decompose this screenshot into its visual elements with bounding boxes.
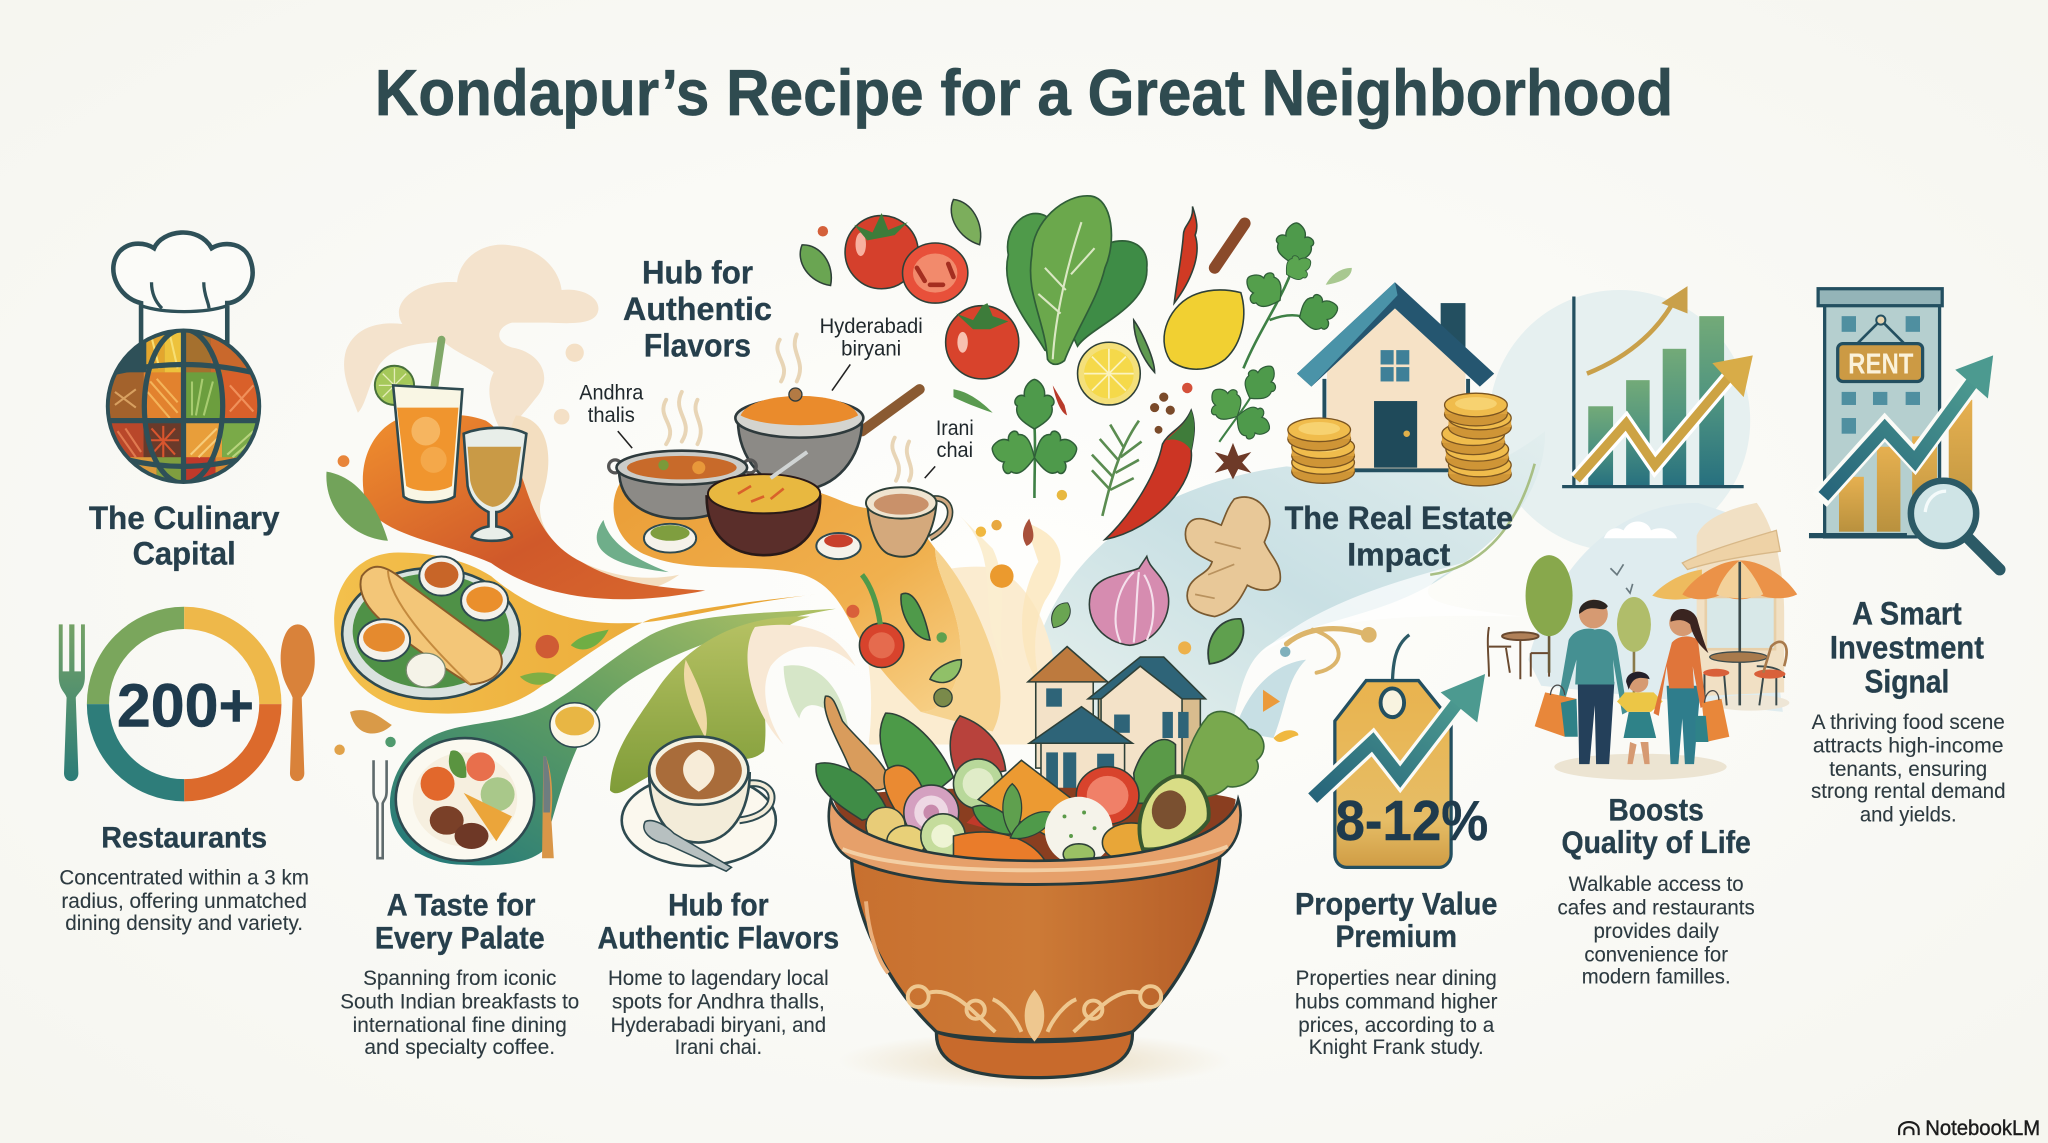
ground shadow	[839, 1032, 1230, 1089]
swoosh: drinks orange	[363, 414, 705, 599]
heading: the real estate impact	[1285, 499, 1513, 573]
lemon slice	[1078, 342, 1140, 405]
text: boosts quality of life: modern familles.	[1582, 964, 1731, 989]
heading: top hub for authentic flavors: Authentic	[623, 290, 772, 327]
text: property value premium	[1295, 886, 1497, 1059]
callout: Hyderabadi biryani: biryani	[841, 337, 901, 360]
callout: Hyderabadi biryani	[820, 315, 923, 391]
text: hub for authentic flavors	[598, 888, 839, 1059]
icon: fine dining plate	[334, 703, 600, 861]
woman	[1654, 609, 1708, 764]
swoosh: central hub orange	[614, 476, 1061, 745]
ground shadow	[1554, 754, 1727, 780]
text: a smart investment signal: Investment	[1830, 628, 1984, 665]
bowl interior	[833, 788, 1236, 865]
text: a smart investment signal: A Smart	[1852, 594, 1962, 631]
text: restaurants: Concentrated within a 3 km	[59, 864, 309, 889]
text: boosts quality of life: cafes and restaurants	[1558, 894, 1755, 919]
awning and umbrella	[1652, 570, 1702, 600]
food	[816, 696, 1264, 865]
text: restaurants: Restaurants	[101, 822, 267, 855]
text: a taste for every palate: and specialty coffee.	[364, 1034, 555, 1059]
cloud and birds	[1604, 522, 1677, 538]
swoosh: pale blue real estate stream	[1028, 290, 1783, 738]
spice globe	[104, 327, 261, 486]
text: property value premium: hubs command higher	[1295, 988, 1497, 1013]
heading: The Culinary Capital	[89, 499, 280, 571]
text: boosts quality of life: convenience for	[1584, 941, 1728, 966]
logo: NotebookLM: NotebookLM	[1925, 1117, 2040, 1140]
text: a smart investment signal: Signal	[1864, 662, 1949, 699]
icon: drinks	[326, 340, 526, 541]
callout: Irani chai: Irani	[936, 417, 974, 440]
callout: Irani chai	[925, 417, 974, 478]
text: a taste for every palate: A Taste for	[387, 888, 536, 923]
text: boosts quality of life: Quality of Life	[1561, 825, 1751, 860]
stat: 200+ restaurants plate: 200+	[117, 671, 254, 740]
parsley mid	[988, 379, 1081, 498]
parsley small right	[1189, 346, 1302, 463]
icon: price tag with arrow: 8-12%	[1336, 789, 1488, 852]
icon: chef hat and spice globe	[104, 233, 261, 486]
tomatoes	[818, 213, 1019, 379]
magnifier	[1911, 481, 2000, 570]
fork	[59, 624, 85, 781]
cafe building	[1697, 503, 1784, 696]
text: a smart investment signal: and yields.	[1860, 802, 1957, 827]
bowl foot	[936, 1032, 1132, 1078]
text: property value premium: Properties near dining	[1296, 965, 1497, 990]
icon: cooking pots	[609, 388, 920, 559]
text: hub for authentic flavors: Home to lagendary local	[608, 965, 829, 990]
icon: rent building with arrow and magnifier: RENT	[1848, 349, 1914, 381]
onion	[1089, 556, 1169, 645]
text: property value premium: Property Value	[1295, 886, 1497, 921]
rosemary	[1092, 421, 1142, 516]
man	[1558, 600, 1627, 764]
text: a taste for every palate: international fine dining	[353, 1012, 567, 1037]
biryani bowl	[707, 452, 820, 555]
thali pot	[609, 451, 756, 519]
small leaves	[792, 238, 840, 292]
callout: Hyderabadi biryani: Hyderabadi	[820, 315, 923, 338]
ring	[98, 618, 270, 790]
heading: the real estate impact: Impact	[1347, 536, 1451, 573]
stat: 200+ restaurants plate	[59, 618, 315, 790]
text: hub for authentic flavors: Hyderabadi biryani, and	[611, 1012, 826, 1037]
icon: rent building with arrow and magnifier	[1809, 289, 2000, 570]
text: restaurants	[59, 822, 309, 935]
heading: top hub for authentic flavors: Flavors	[644, 327, 751, 364]
chart: rising bars with arrows	[1562, 286, 1753, 487]
chef hat	[113, 233, 253, 342]
ornament	[908, 986, 1161, 1038]
spinach	[1007, 196, 1147, 364]
swoosh: green fine dining	[390, 609, 836, 865]
callout: Irani chai: chai	[936, 439, 973, 462]
text: restaurants: dining density and variety.	[65, 910, 303, 935]
big pot with handle	[735, 388, 920, 490]
callout: Andhra thalis: thalis	[588, 404, 635, 427]
left table	[1488, 627, 1549, 679]
text: restaurants: radius, offering unmatched	[61, 888, 307, 913]
spoon	[281, 624, 315, 781]
text: a smart investment signal	[1811, 594, 2006, 827]
icon: chai cup	[866, 487, 950, 557]
text: a taste for every palate: Spanning from iconic	[363, 965, 557, 990]
swoosh: breakfast yellow	[334, 553, 816, 714]
icon: bowl of ingredients and houses	[816, 647, 1298, 1089]
text: property value premium: Knight Frank study.	[1309, 1034, 1484, 1059]
heading: top hub for authentic flavors	[623, 253, 772, 364]
heading: The Culinary Capital: The Culinary	[89, 499, 280, 536]
text: a smart investment signal: attracts high-income	[1813, 732, 2004, 757]
text: boosts quality of life	[1558, 792, 1755, 989]
text: property value premium: Premium	[1336, 919, 1457, 954]
title: Kondapur’s Recipe for a Great Neighborhood	[375, 56, 1673, 129]
text: a smart investment signal: strong rental demand	[1811, 778, 2006, 803]
text: property value premium: prices, according to a	[1298, 1012, 1494, 1037]
text: a taste for every palate	[340, 888, 579, 1059]
peppercorns	[1150, 393, 1175, 434]
big chili	[1105, 410, 1194, 540]
icon: price tag with arrow	[1313, 635, 1488, 867]
text: a taste for every palate: Every Palate	[375, 920, 545, 955]
text: a smart investment signal: tenants, ensuring	[1829, 756, 1987, 781]
heading: the real estate impact: The Real Estate	[1285, 499, 1513, 536]
text: hub for authentic flavors: Authentic Flavors	[598, 920, 839, 955]
falling bits	[991, 520, 1002, 530]
bowl body	[852, 857, 1220, 1040]
icon: dosa plate	[342, 556, 609, 699]
ginger	[1185, 497, 1280, 617]
lemon	[1164, 290, 1244, 369]
callout: Andhra thalis	[579, 382, 644, 448]
trees	[1526, 555, 1651, 705]
text: boosts quality of life: Boosts	[1608, 792, 1704, 827]
heading: top hub for authentic flavors: Hub for	[642, 253, 753, 290]
heading: The Culinary Capital: Capital	[133, 534, 236, 571]
cinnamon	[1215, 223, 1245, 268]
text: boosts quality of life: provides daily	[1593, 918, 1719, 943]
icon: house with coins	[1288, 282, 1511, 486]
chutney bowls	[644, 524, 696, 553]
text: hub for authentic flavors: spots for Andhra thalls,	[612, 988, 825, 1013]
houses	[1028, 647, 1206, 794]
chili top	[1174, 206, 1197, 303]
swoosh: olive coffee	[610, 616, 856, 793]
text: a smart investment signal: A thriving food scene	[1812, 709, 2005, 734]
text: hub for authentic flavors: Hub for	[668, 888, 769, 923]
text: boosts quality of life: Walkable access to	[1569, 871, 1744, 896]
star anise	[1215, 443, 1251, 479]
icon: steam wisps	[663, 334, 911, 481]
steam cloud	[344, 245, 679, 593]
icon: falling ingredients	[792, 194, 1352, 707]
text: hub for authentic flavors: Irani chai.	[675, 1034, 762, 1059]
bowl rim	[829, 799, 1241, 884]
parsley top right	[1238, 221, 1342, 368]
text: a taste for every palate: South Indian breakfasts to	[340, 988, 579, 1013]
callout: Andhra thalis: Andhra	[579, 382, 644, 405]
shopping bags	[1535, 685, 1729, 742]
icon: family at cafe	[1488, 503, 1797, 780]
child	[1617, 671, 1663, 764]
icon: latte cup	[622, 737, 776, 871]
coin stacks	[1288, 393, 1511, 486]
